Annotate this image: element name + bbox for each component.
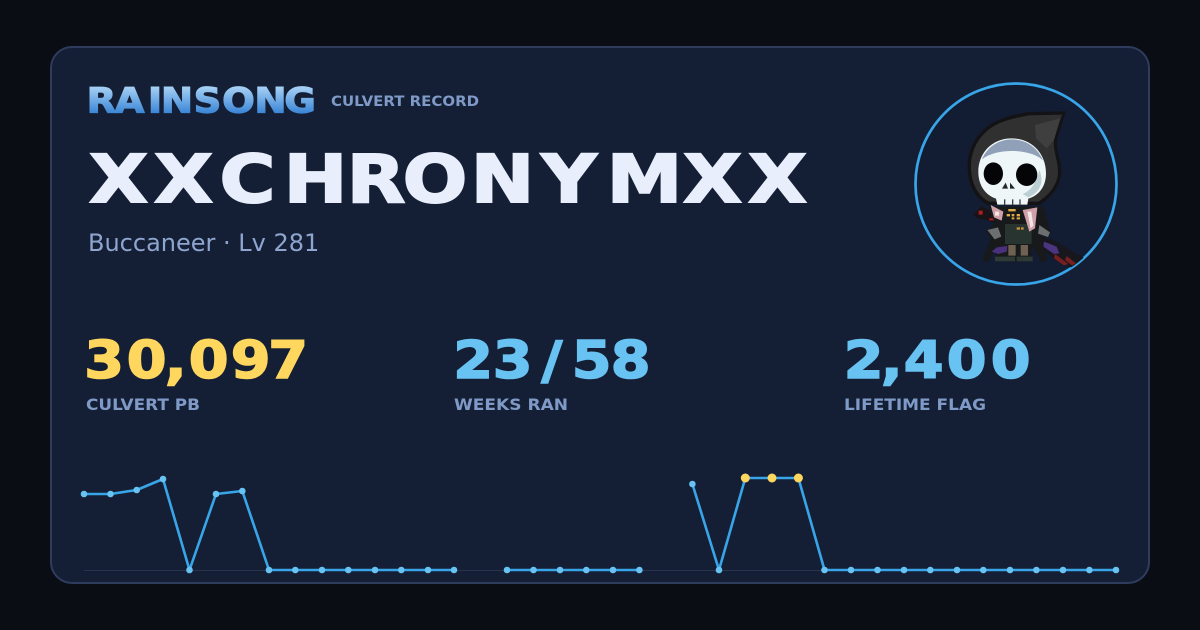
icon: skull teeth bbox=[1004, 199, 1021, 205]
label: CULVERT PB bbox=[86, 395, 200, 414]
personal best points bbox=[741, 474, 803, 482]
subtitle: CULVERT RECORD bbox=[331, 94, 479, 110]
icon: skull eyes bbox=[984, 162, 1003, 185]
label: LIFETIME FLAG bbox=[844, 395, 986, 414]
series line bbox=[84, 478, 1116, 570]
hood bbox=[968, 111, 1066, 205]
cloak and body bbox=[983, 207, 1051, 263]
stat: culvert pb: 30,097 bbox=[84, 329, 308, 390]
brand heading: RAINSONG bbox=[87, 80, 316, 121]
weapon bbox=[1042, 238, 1084, 268]
skull bbox=[978, 138, 1046, 205]
stat: lifetime flag: 2,400 bbox=[844, 329, 1031, 390]
class and level: Buccaneer · Lv 281 bbox=[88, 229, 319, 257]
icon: skull nose bbox=[1002, 183, 1015, 189]
label: WEEKS RAN bbox=[454, 395, 568, 414]
data points bbox=[81, 476, 1119, 573]
avatar bbox=[916, 84, 1116, 284]
icon: hooded skeleton sprite bbox=[968, 111, 1085, 269]
stat: weeks ran: 23/58 bbox=[453, 329, 651, 390]
player name title: XXCHRONYMXX bbox=[89, 141, 807, 218]
avatar ring bbox=[916, 84, 1116, 284]
line chart: weekly culvert scores bbox=[81, 474, 1119, 573]
scarf and gold trim bbox=[991, 205, 1037, 232]
panel: record card bbox=[51, 47, 1149, 583]
